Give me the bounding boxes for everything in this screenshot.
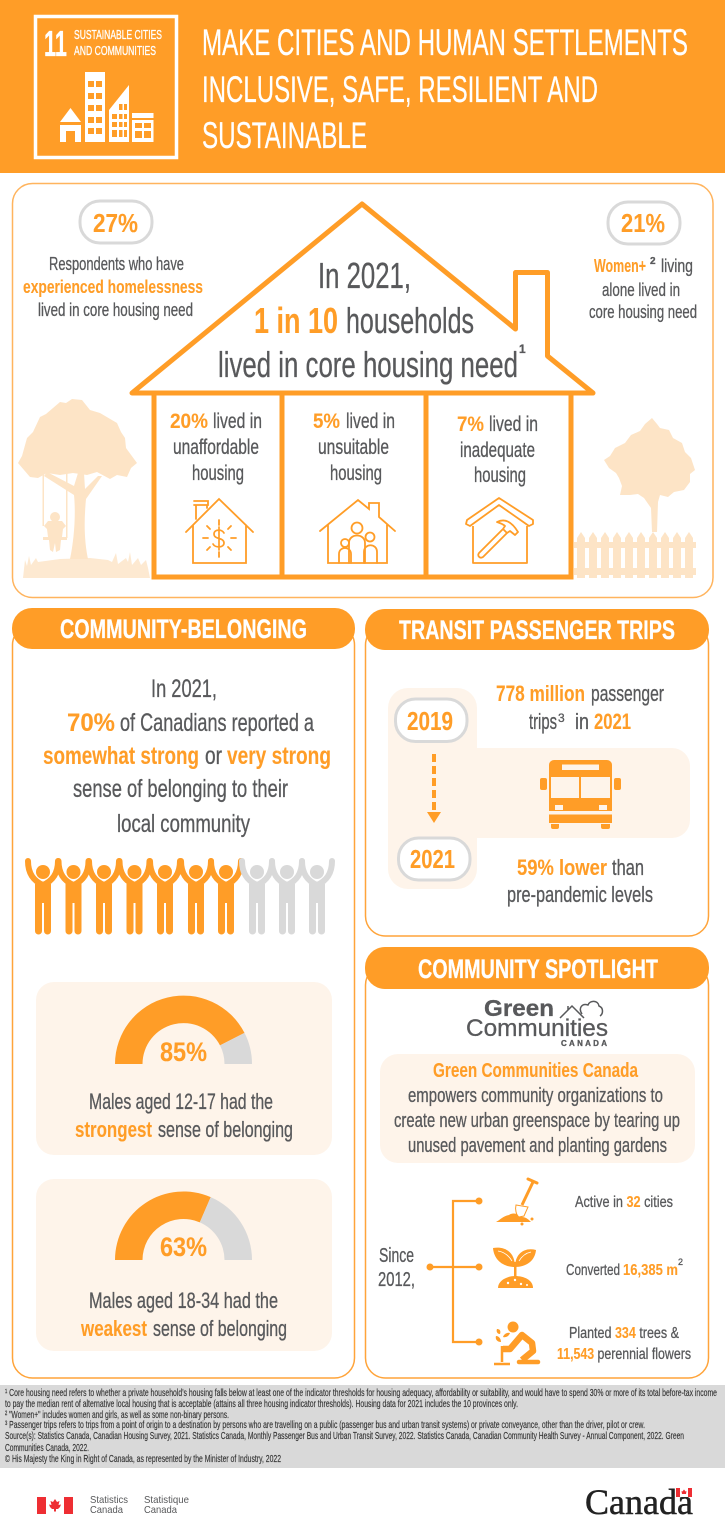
text: since 2012: Since — [379, 1245, 414, 1267]
gauge card: 63% — [36, 1179, 332, 1351]
year pill: 2019: 2019 — [407, 706, 453, 736]
logo: Green Communities Canada: Communities — [466, 1015, 608, 1042]
panel: community belonging — [12, 608, 355, 1378]
callout: 21%: 21% — [621, 208, 665, 238]
icon: city buildings — [60, 72, 154, 142]
gauge card: 85%: sense of belonging — [158, 1117, 293, 1142]
text: 70% belonging — [43, 675, 331, 838]
logo: Green Communities Canada — [466, 995, 608, 1048]
room: unaffordable housing: lived in — [213, 410, 262, 433]
icon: shovel — [496, 1179, 537, 1226]
room: inadequate housing: 7% — [457, 413, 484, 436]
callout: 21%: alone lived in — [602, 280, 680, 300]
logo: Canada wordmark: Canada — [585, 1482, 693, 1522]
house headline: households — [346, 300, 474, 341]
room: inadequate housing — [457, 413, 538, 563]
house headline: lived in core housing need — [218, 344, 518, 385]
text: 59% lower: than — [612, 855, 644, 880]
text: 70% belonging: of Canadians reported a — [120, 709, 314, 737]
panel: transit passenger trips — [365, 609, 709, 936]
gauge card: 63%: Males aged 18-34 had the — [89, 1288, 278, 1313]
text: 778 million: in — [575, 709, 589, 734]
footnotes: ² "Women+" includes women and girls, as well as some non-binary persons. — [5, 1409, 229, 1421]
timeline background — [388, 688, 690, 889]
text: 70% belonging: sense of belonging to their — [73, 775, 288, 803]
icon: house with hammer — [466, 498, 533, 563]
logo: Green Communities Canada: Green — [484, 995, 554, 1021]
house headline: In 2021, — [318, 255, 411, 296]
text card: Green Communities Canada: Green Communities Canada — [433, 1060, 639, 1082]
house outline — [132, 204, 593, 577]
logo: Statistics Canada: Statistics — [90, 1494, 128, 1506]
text: 70% belonging: 70% — [67, 709, 115, 737]
callout: 21%: Women+ — [594, 256, 646, 276]
title — [202, 22, 688, 156]
callout: 21%: 2 — [650, 256, 656, 267]
callout: 21% — [589, 202, 697, 322]
year pill: 2021 — [398, 838, 470, 880]
room: inadequate housing: housing — [474, 464, 526, 487]
callout: 27%: Respondents who have — [49, 254, 184, 274]
text: since 2012 — [378, 1245, 415, 1291]
year pill: 2021: 2021 — [410, 844, 455, 874]
text: 778 million: trips — [529, 709, 557, 734]
room: unsuitable housing: 5% — [313, 410, 340, 433]
callout: 21%: living — [661, 256, 693, 276]
room: unaffordable housing: housing — [192, 462, 244, 485]
footnotes: Communities Canada, 2022. — [5, 1442, 89, 1454]
text card: Green Communities Canada — [380, 1054, 695, 1163]
arrow: 2019 to 2021 — [427, 754, 441, 823]
logo: Statistics Canada: Canada — [144, 1504, 177, 1516]
text: 70% belonging: In 2021, — [151, 675, 217, 703]
stat: active cities: Active in 32 cities — [575, 1194, 673, 1211]
icon: gardener — [494, 1322, 538, 1364]
logo: Statistics Canada — [37, 1494, 189, 1516]
gauge card: 63%: sense of belonging — [153, 1316, 287, 1341]
connector tree — [426, 1198, 482, 1346]
SDG 11 badge — [36, 16, 176, 158]
stat: planted: 11,543 perennial flowers — [557, 1346, 691, 1363]
callout: 27%: 27% — [93, 208, 138, 238]
gauge card: 63%: weakest — [80, 1316, 148, 1341]
logo: Green Communities Canada: CANADA — [561, 1039, 607, 1048]
stat: converted area: 16,385 m — [623, 1262, 678, 1279]
room: unsuitable housing: unsuitable — [318, 436, 389, 459]
text: 59% lower — [507, 855, 653, 907]
panel: core housing need — [12, 184, 713, 598]
room: unaffordable housing: 20% — [170, 410, 208, 433]
panel: community spotlight — [365, 947, 709, 1378]
icon: house with family — [320, 500, 395, 563]
stat: converted area: 2 — [678, 1257, 683, 1267]
SDG 11 badge: AND COMMUNITIES — [74, 44, 156, 58]
heading: transit passenger trips — [365, 609, 709, 650]
room: unsuitable housing: housing — [330, 462, 382, 485]
text: 778 million: 778 million — [496, 681, 585, 706]
text: 778 million: 2021 — [594, 709, 631, 734]
heading: community-belonging: COMMUNITY-BELONGING — [60, 614, 307, 644]
text: since 2012: 2012, — [378, 1269, 415, 1291]
room: unsuitable housing — [313, 410, 395, 563]
pictogram: 7 of 10 people — [28, 861, 332, 934]
icon: house with dollar — [186, 499, 253, 563]
gauge card: 85% — [36, 982, 332, 1155]
header banner — [0, 0, 725, 173]
text: 778 million — [496, 681, 664, 734]
icon: Canadian flag — [37, 1497, 73, 1514]
text: 778 million: passenger — [591, 681, 664, 706]
text: 70% belonging: somewhat strong — [43, 742, 199, 770]
illustration: tree and picket fence — [574, 418, 696, 578]
title: SUSTAINABLE — [202, 115, 367, 156]
gauge card: 85%: 85% — [160, 1037, 207, 1067]
icon: bus — [540, 760, 621, 829]
gauge card: 85%: strongest — [75, 1117, 153, 1142]
room: unaffordable housing: unaffordable — [173, 436, 259, 459]
house headline: 1 in 10 — [254, 300, 338, 341]
gauge card: 63%: 63% — [160, 1232, 207, 1262]
callout: 27%: experienced homelessness — [23, 277, 203, 297]
room: unsuitable housing: lived in — [346, 410, 395, 433]
footnotes: © His Majesty the King in Right of Canada, as represented by the Minister of Industry, 2022 — [5, 1453, 281, 1465]
heading: community-belonging — [12, 608, 355, 649]
text: 70% belonging: local community — [117, 810, 250, 838]
SDG 11 badge: SUSTAINABLE CITIES — [74, 28, 162, 42]
text: 70% belonging: or — [205, 742, 222, 770]
illustration: tree with swing — [18, 399, 150, 578]
logo: Statistics Canada: Canada — [90, 1504, 123, 1516]
text: 778 million: 3 — [558, 711, 565, 725]
house headline — [218, 255, 526, 385]
stat: planted: Planted 334 trees & — [569, 1325, 679, 1342]
text: 59% lower: 59% lower — [517, 855, 607, 880]
stat: converted area: Converted — [566, 1262, 620, 1279]
room: inadequate housing: lived in — [489, 413, 538, 436]
room: inadequate housing: inadequate — [460, 439, 535, 462]
room: unaffordable housing — [170, 410, 262, 563]
heading: community spotlight — [365, 947, 709, 989]
gauge card: 85%: Males aged 12-17 had the — [89, 1089, 273, 1114]
callout: 27% — [23, 201, 203, 320]
text: 70% belonging: very strong — [227, 742, 331, 770]
footnotes — [0, 1385, 725, 1468]
stat: planted — [557, 1325, 691, 1363]
text: 59% lower: pre-pandemic levels — [507, 882, 653, 907]
stat: converted area — [566, 1257, 683, 1279]
logo: Statistics Canada: Statistique — [144, 1494, 189, 1506]
icon: sprout — [493, 1248, 536, 1288]
SDG 11 badge: 11 — [44, 23, 67, 64]
house headline: 1 — [519, 342, 526, 356]
callout: 27%: lived in core housing need — [38, 300, 193, 320]
year pill: 2019 — [396, 699, 467, 742]
